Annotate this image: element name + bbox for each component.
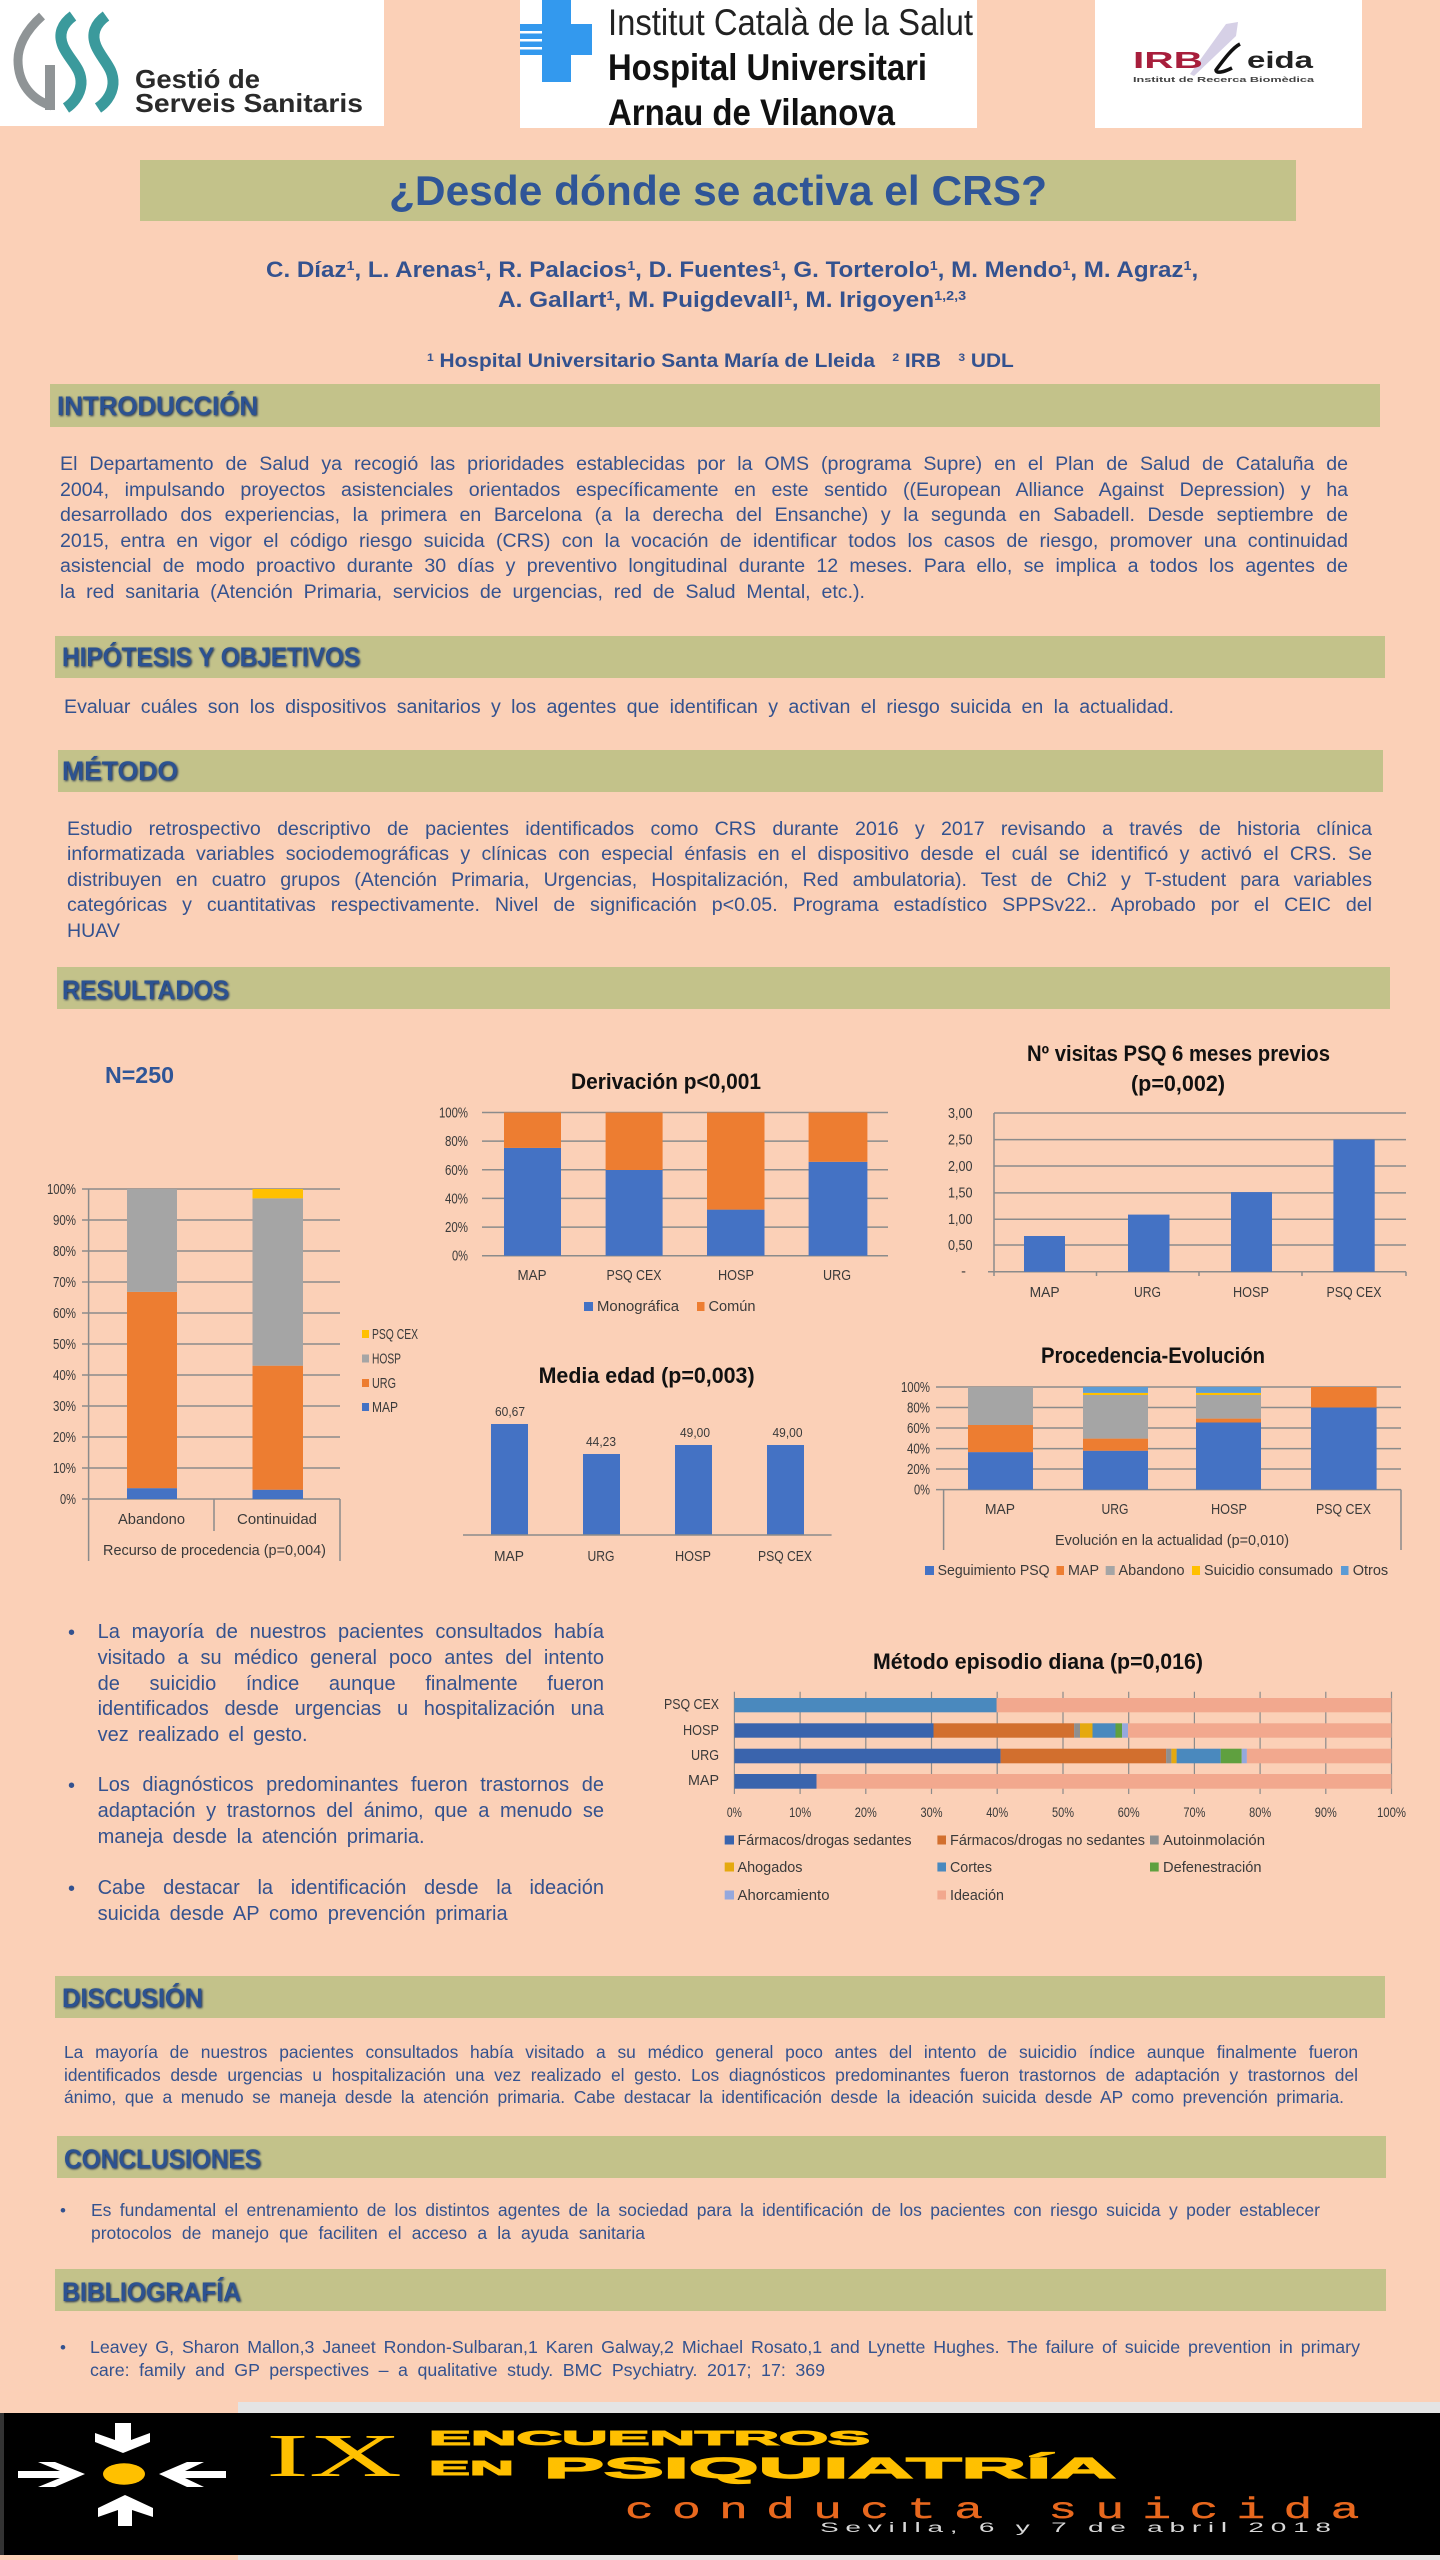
chart: método episodio diana: Método episodio diana (p=0,016) [873,1649,1203,1674]
text block: introducción: El Departamento de Salud ya recogió las prioridades establecidas por la OMS (programa Supre) en el Plan de Salud de Cataluña de [60,453,1348,475]
chart: método episodio diana: Fármacos/drogas sedantes [738,1833,912,1849]
text block: método: HUAV [67,920,120,942]
title [140,160,1296,221]
chart: método episodio diana: Ahogados [738,1860,802,1876]
chart: procedencia-evolución: 40% [907,1442,930,1458]
text block: conclusiones: • [60,2201,66,2220]
chart: recurso de procedencia: 10% [53,1461,76,1477]
bullet 2: adaptación y trastornos del ánimo, que a menudo se [98,1800,604,1822]
chart: recurso de procedencia: 0% [60,1492,76,1508]
heading: discusión: DISCUSIÓN [62,1982,203,2013]
chart: nº visitas PSQ: 1,50 [948,1186,972,1202]
chart: derivación: PSQ CEX [606,1268,662,1284]
bullet 1: de suicidio índice aunque finalmente fueron [98,1673,604,1695]
text block: discusión: La mayoría de nuestros pacientes consultados había visitado a su médico general poco antes del intento de suicidio índice aunque finalmente fueron [64,2042,1358,2062]
chart: nº visitas PSQ: 2,50 [948,1132,972,1148]
authors: , G. Torterolo [780,257,930,282]
chart: método episodio diana: 20% [855,1805,877,1820]
chart: procedencia-evolución: Evolución en la actualidad (p=0,010) [1055,1533,1289,1549]
text block: conclusiones: Es fundamental el entrenamiento de los distintos agentes de la sociedad para la identificación de los pacientes con riesgo suicida y poder establecer [91,2200,1320,2220]
chart: método episodio diana [664,1649,1406,1904]
affiliations: 1 [427,352,434,364]
bullet 1: vez realizado el gesto. [98,1724,308,1746]
text block: bibliografía: • [60,2338,66,2357]
chart: método episodio diana: 10% [789,1805,811,1820]
authors: , M. Irigoyen [792,287,934,312]
text block: discusión: ánimo, que a menudo se maneja desde la atención primaria. Cabe destacar la identificación desde la ideación suicida desde AP como prevención primaria. [64,2087,1344,2107]
text block: conclusiones [60,2200,1320,2243]
heading: conclusiones: CONCLUSIONES [64,2144,261,2174]
chart: nº visitas PSQ: Nº visitas PSQ 6 meses previos [1027,1041,1330,1066]
chart: método episodio diana: Autoinmolación [1163,1833,1265,1849]
heading: conclusiones [57,2136,1386,2178]
chart: procedencia-evolución: Abandono [1118,1563,1184,1579]
chart: método episodio diana: 0% [727,1805,742,1820]
chart: procedencia-evolución: 60% [907,1421,930,1437]
logo: Institut Català de la Salut, Hospital Universitari Arnau de Vilanova [520,0,977,133]
text block: introducción: la red sanitaria (Atención Primaria, servicios de urgencias, red de Salud Mental, etc.). [60,581,865,603]
footer banner: IX Encuentros en Psiquiatría: conducta suicida [625,2494,1378,2528]
bullet 2 [98,1774,604,1848]
authors: 1 [784,289,792,303]
bullet markers: • [68,1622,75,1644]
chart: media edad: MAP [494,1549,524,1565]
chart: procedencia-evolución: PSQ CEX [1316,1502,1371,1518]
chart: método episodio diana: Fármacos/drogas no sedantes [950,1833,1145,1849]
authors: 1 [930,259,938,273]
heading: hipótesis y objetivos: HIPÓTESIS Y OBJETIVOS [62,641,360,672]
chart: derivación [439,1069,888,1315]
chart: método episodio diana: 60% [1118,1805,1140,1820]
heading: resultados: RESULTADOS [62,975,229,1005]
text block: introducción: 2004, impulsando proyectos asistenciales orientados específicamente en este sentido ((European Alliance Against Depression) y ha [60,479,1348,501]
authors: , M. Agraz [1070,257,1184,282]
logo: Gestió de Serveis Sanitaris: Serveis Sanitaris [135,88,363,118]
bullet 3 [98,1877,604,1925]
chart: media edad: HOSP [675,1549,711,1565]
logo: IRB Lleida [1095,0,1362,128]
logo: Gestió de Serveis Sanitaris: Gestió de [135,64,260,94]
chart: método episodio diana: Ahorcamiento [738,1888,830,1904]
footer banner: IX Encuentros en Psiquiatría [0,2402,1440,2560]
affiliations: IRB [899,351,958,372]
heading: bibliografía: BIBLIOGRAFÍA [62,2276,241,2307]
chart: media edad [463,1363,832,1565]
heading: introducción: INTRODUCCIÓN [57,390,258,421]
chart: recurso de procedencia: URG [372,1376,396,1392]
text block: discusión: identificados desde urgencias u hospitalización una vez realizado el gesto. Los diagnósticos predominantes fueron trastornos de adaptación y trastornos del [64,2064,1358,2084]
bullet 1: identificados desde urgencias u hospitalización una [98,1698,604,1720]
heading: resultados [57,967,1390,1009]
title: ¿Desde dónde se activa el CRS? [389,167,1047,214]
heading: método [58,750,1383,792]
chart: procedencia-evolución: 100% [901,1380,930,1396]
bullet 1 [98,1621,604,1746]
chart: método episodio diana: 30% [920,1805,942,1820]
bullet 2: Los diagnósticos predominantes fueron trastornos de [98,1774,604,1796]
bullet 3: suicida desde AP como prevención primaria [98,1903,508,1925]
chart: nº visitas PSQ: MAP [1030,1285,1060,1301]
authors: 1 [1184,259,1192,273]
chart: media edad: 49,00 [772,1425,802,1440]
chart: recurso de procedencia: 20% [53,1430,76,1446]
text block: introducción: asistencial de modo proactivo durante 30 días y preventivo longitudinal durante 12 meses. Para ello, se implica a todos los agentes de [60,555,1348,577]
chart: nº visitas PSQ: 1,00 [948,1212,972,1228]
chart: método episodio diana: URG [691,1748,719,1764]
chart: método episodio diana: 50% [1052,1805,1074,1820]
chart: recurso de procedencia: Recurso de procedencia (p=0,004) [103,1543,326,1559]
chart: media edad: PSQ CEX [758,1549,812,1565]
text block: conclusiones: protocolos de manejo que faciliten el acceso a la ayuda sanitaria [91,2223,645,2243]
chart: recurso de procedencia: 100% [47,1182,76,1198]
chart: procedencia-evolución: Otros [1353,1563,1388,1579]
authors: 1 [627,259,636,273]
chart: nº visitas PSQ: 3,00 [948,1106,972,1122]
chart: recurso de procedencia: 80% [53,1244,76,1260]
authors [266,257,1198,312]
chart: recurso de procedencia: 70% [53,1275,76,1291]
text block: introducción: 2015, entra en vigor el código riesgo suicida (CRS) con la vocación de identificar todos los casos de riesgo, promover una continuidad [60,530,1348,552]
chart: recurso de procedencia: 40% [53,1368,76,1384]
logo: Institut Català de la Salut, Hospital Universitari Arnau de Vilanova: Arnau de Vilanova [608,92,895,133]
chart: método episodio diana: Ideación [950,1888,1004,1904]
chart: derivación: Común [708,1299,756,1315]
text block: hipótesis: Evaluar cuáles son los dispositivos sanitarios y los agentes que identifican y activan el riesgo suicida en la actualidad. [64,696,1174,718]
chart: recurso de procedencia: Abandono [118,1512,185,1528]
chart: nº visitas PSQ: URG [1134,1285,1161,1301]
heading: introducción [50,384,1380,427]
authors: 1 [477,259,485,273]
bullet markers: • [68,1878,75,1900]
authors: , D. Fuentes [635,257,772,282]
affiliations: Hospital Universitario Santa María de Lleida [434,351,892,372]
chart: método episodio diana: MAP [688,1773,719,1789]
logo: IRB Lleida: IRB [1133,47,1203,73]
chart: derivación: 100% [439,1106,468,1122]
logo: Institut Català de la Salut, Hospital Universitari Arnau de Vilanova: Institut Català de la Salut [608,2,974,43]
chart: recurso de procedencia: MAP [372,1400,398,1416]
chart: recurso de procedencia: 90% [53,1213,76,1229]
logo: IRB Lleida: Institut de Recerca Biomèdica [1133,75,1315,84]
bullet markers: • [68,1775,75,1797]
chart: derivación: Monográfica [597,1299,680,1315]
logo: IRB Lleida: eida [1247,47,1313,73]
chart: nº visitas PSQ [948,1041,1406,1301]
footer banner: IX Encuentros en Psiquiatría: Sevilla, 6 y 7 de abril 2018 [820,2519,1331,2535]
bullet 1: visitado a su médico general poco antes del intento [98,1647,604,1669]
chart: método episodio diana: 80% [1249,1805,1271,1820]
chart: nº visitas PSQ: (p=0,002) [1131,1071,1225,1096]
text block: discusión [64,2042,1358,2107]
chart: procedencia-evolución: 80% [907,1400,930,1416]
affiliations: UDL [965,351,1014,372]
chart: derivación: 0% [452,1249,468,1265]
chart: recurso de procedencia: 30% [53,1399,76,1415]
text block: introducción: desarrollado dos experiencias, la primera en Barcelona (a la derecha del Ensanche) y la segunda en Sabadell. Desde septiembre de [60,504,1348,526]
chart: método episodio diana: 90% [1315,1805,1337,1820]
chart: media edad: 49,00 [680,1425,710,1440]
bullet markers [68,1622,75,1900]
heading: hipótesis y objetivos [55,636,1385,678]
text block: introducción [60,453,1348,603]
affiliations: 2 [892,352,899,364]
chart: método episodio diana: Defenestración [1163,1860,1262,1876]
chart: media edad: Media edad (p=0,003) [539,1363,755,1388]
chart: procedencia-evolución: URG [1102,1502,1128,1518]
chart: media edad: 60,67 [495,1404,525,1419]
chart: procedencia-evolución: HOSP [1211,1502,1247,1518]
sample size N=250: N=250 [105,1062,174,1088]
bullet 3: Cabe destacar la identificación desde la ideación [98,1877,604,1899]
chart: método episodio diana: Cortes [950,1860,992,1876]
chart: método episodio diana: 100% [1377,1805,1406,1820]
chart: procedencia-evolución: Suicidio consumado [1204,1563,1333,1579]
authors: 1 [347,259,355,273]
text block: bibliografía: Leavey G, Sharon Mallon,3 Janeet Rondon-Sulbaran,1 Karen Galway,2 Michael Rosato,1 and Lynette Hughes. The failure of suicide prevention in primary [90,2337,1360,2357]
chart: procedencia-evolución: 20% [907,1462,930,1478]
authors: , [1191,257,1198,282]
chart: derivación: 40% [445,1191,468,1207]
authors: , R. Palacios [485,257,627,282]
chart: método episodio diana: 40% [986,1805,1008,1820]
chart: recurso de procedencia [47,1182,418,1561]
chart: derivación: Derivación p<0,001 [571,1069,761,1094]
footer banner: IX Encuentros en Psiquiatría: IX [266,2423,402,2490]
chart: media edad: URG [588,1549,614,1565]
text block: bibliografía [60,2337,1360,2380]
chart: procedencia-evolución [901,1343,1401,1579]
authors: , M. Mendo [938,257,1062,282]
chart: nº visitas PSQ: 2,00 [948,1159,972,1175]
bullet list: hallazgos [68,1621,604,1925]
authors: A. Gallart [498,287,606,312]
chart: método episodio diana: HOSP [683,1723,719,1739]
authors: 1,2,3 [934,289,967,303]
chart: derivación: HOSP [718,1268,754,1284]
text block: bibliografía: care: family and GP perspectives – a qualitative study. BMC Psychiatry. 2017; 17: 369 [90,2360,825,2380]
chart: método episodio diana: 70% [1183,1805,1205,1820]
chart: procedencia-evolución: Procedencia-Evolución [1041,1343,1265,1368]
text block: método: distribuyen en cuatro grupos (Atención Primaria, Urgencias, Hospitalización, Red ambulatoria). Test de Chi2 y T-student para variables [67,869,1372,891]
chart: nº visitas PSQ: 0,50 [948,1238,972,1254]
bullet 1: La mayoría de nuestros pacientes consultados había [98,1621,604,1643]
authors: 1 [772,259,780,273]
authors: 1 [606,289,615,303]
chart: procedencia-evolución: MAP [1068,1563,1099,1579]
chart: recurso de procedencia: PSQ CEX [372,1327,418,1343]
footer banner: IX Encuentros en Psiquiatría: ENCUENTROS [429,2428,870,2450]
chart: nº visitas PSQ: HOSP [1233,1285,1269,1301]
affiliations: 3 [958,352,965,364]
heading: bibliografía [55,2269,1386,2311]
chart: nº visitas PSQ: - [961,1264,966,1280]
chart: recurso de procedencia: Continuidad [237,1512,317,1528]
chart: derivación: 20% [445,1220,468,1236]
heading: discusión [55,1976,1385,2018]
footer banner: IX Encuentros en Psiquiatría: PSIQUIATRÍA [544,2451,1116,2485]
logo: Gestió de Serveis Sanitaris [0,0,384,126]
text block: método: informatizada variables sociodemográficas y clínicas con especial énfasis en el dispositivo desde el cuál se identificó y activó el CRS. Se [67,843,1372,865]
text block: método [67,818,1372,942]
authors: , L. Arenas [354,257,477,282]
footer banner: IX Encuentros en Psiquiatría: EN [429,2458,514,2480]
chart: nº visitas PSQ: PSQ CEX [1326,1285,1382,1301]
chart: recurso de procedencia: HOSP [372,1352,401,1368]
chart: recurso de procedencia: 50% [53,1337,76,1353]
chart: procedencia-evolución: 0% [914,1482,930,1498]
bullet 2: maneja desde la atención primaria. [98,1826,425,1848]
chart: derivación: MAP [518,1268,546,1284]
chart: método episodio diana: PSQ CEX [664,1697,719,1713]
chart: procedencia-evolución: MAP [985,1502,1015,1518]
chart: recurso de procedencia: 60% [53,1306,76,1322]
authors: , M. Puigdevall [614,287,784,312]
chart: derivación: URG [823,1268,851,1284]
heading: método: MÉTODO [62,755,178,786]
chart: procedencia-evolución: Seguimiento PSQ [938,1563,1050,1579]
text block: método: Estudio retrospectivo descriptivo de pacientes identificados como CRS durante 2016 y 2017 revisando a través de historia clínica [67,818,1372,840]
logo: Institut Català de la Salut, Hospital Universitari Arnau de Vilanova: Hospital Universitari [608,47,927,88]
chart: media edad: 44,23 [586,1434,616,1449]
text block: método: categóricas y cuantitativas respectivamente. Nivel de significación p<0.05. Programa estadístico SPPSv22.. Aprobado por el CEIC del [67,894,1372,916]
authors: C. Díaz [266,257,347,282]
chart: derivación: 60% [445,1163,468,1179]
authors: 1 [1062,259,1071,273]
chart: derivación: 80% [445,1134,468,1150]
